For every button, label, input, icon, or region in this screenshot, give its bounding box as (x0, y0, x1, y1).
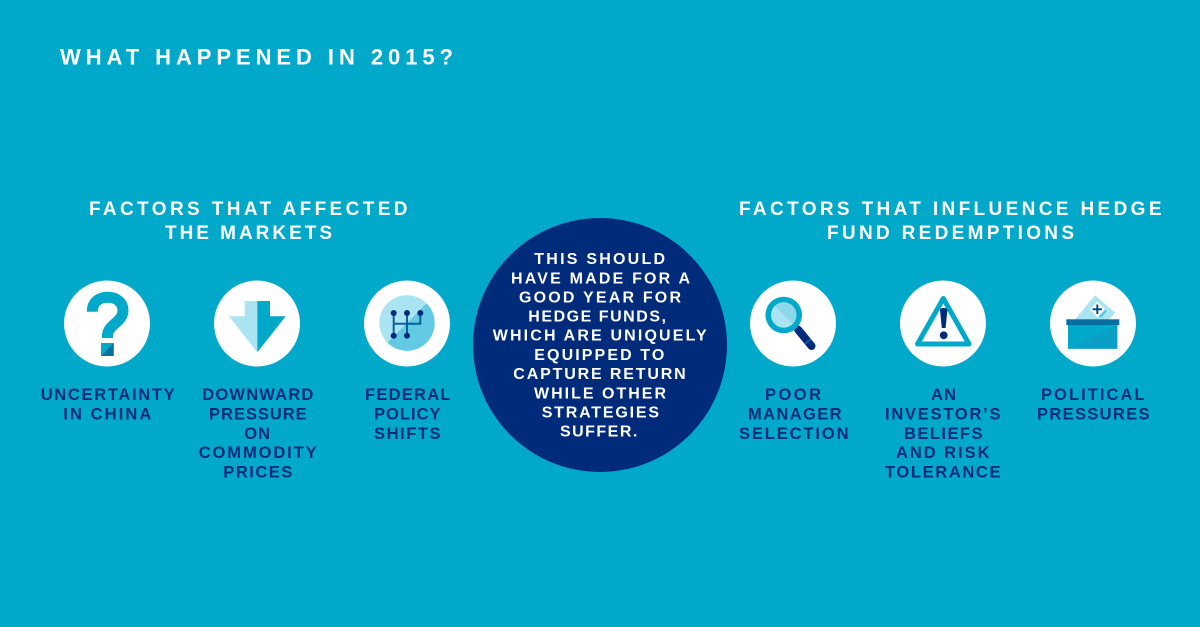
label: an investor's beliefs and risk tolerance: AN (931, 386, 956, 404)
icon: ballot box (1050, 280, 1136, 366)
label: federal policy shifts: POLICY (374, 405, 440, 423)
icon: gear shift (364, 280, 450, 366)
central circle callout: WHILE OTHER (534, 386, 666, 403)
title: WHAT HAPPENED IN 2015? (60, 44, 453, 70)
heading: factors that influence hedge fund redemptions (739, 199, 1162, 244)
label: downward pressure on commodity prices: PRICES (223, 463, 292, 481)
label: poor manager selection: MANAGER (748, 405, 842, 423)
label: federal policy shifts (365, 386, 450, 443)
label: an investor's beliefs and risk tolerance: INVESTOR’S (885, 405, 1000, 423)
label: an investor's beliefs and risk tolerance: AND RISK (896, 444, 990, 462)
icon: magnifying glass (750, 280, 836, 366)
icon: warning triangle (900, 280, 986, 366)
label: downward pressure on commodity prices: DOWNWARD (202, 386, 313, 404)
central circle callout: THIS SHOULD (534, 251, 665, 268)
heading: factors that affected the markets: THE MARKETS (165, 223, 332, 244)
label: uncertainty in China (41, 386, 175, 423)
label: an investor's beliefs and risk tolerance: BELIEFS (904, 425, 982, 443)
label: downward pressure on commodity prices: PRESSURE (209, 405, 307, 423)
central circle callout: STRATEGIES (542, 405, 659, 422)
heading: factors that influence hedge fund redemptions: FUND REDEMPTIONS (827, 223, 1074, 244)
icon: downward arrow (214, 280, 300, 366)
central circle callout: WHICH ARE UNIQUELY (493, 328, 707, 345)
central circle callout: HAVE MADE FOR A (511, 270, 690, 287)
label: downward pressure on commodity prices: COMMODITY (199, 444, 317, 462)
central circle callout (473, 218, 727, 472)
label: an investor's beliefs and risk tolerance (885, 386, 1000, 481)
label: downward pressure on commodity prices: ON (244, 425, 270, 443)
heading: factors that influence hedge fund redemptions: FACTORS THAT INFLUENCE HEDGE (739, 199, 1162, 220)
label: poor manager selection (739, 386, 848, 443)
central circle callout: EQUIPPED TO (534, 347, 664, 364)
label: uncertainty in China: IN CHINA (63, 405, 151, 423)
label: political pressures: POLITICAL (1041, 386, 1144, 404)
label: federal policy shifts: SHIFTS (374, 425, 440, 443)
label: federal policy shifts: FEDERAL (365, 386, 450, 404)
central circle callout: HEDGE FUNDS, (528, 309, 666, 326)
central circle callout: SUFFER. (560, 424, 637, 441)
heading: factors that affected the markets: FACTORS THAT AFFECTED (89, 199, 408, 220)
central circle callout: GOOD YEAR FOR (519, 290, 681, 307)
heading: factors that affected the markets (89, 199, 408, 244)
label: poor manager selection: POOR (765, 386, 821, 404)
label: an investor's beliefs and risk tolerance: TOLERANCE (885, 463, 1000, 481)
label: poor manager selection: SELECTION (739, 425, 848, 443)
label: political pressures: PRESSURES (1037, 405, 1150, 423)
label: political pressures (1037, 386, 1150, 423)
central circle callout: CAPTURE RETURN (513, 366, 686, 383)
icon: question mark (64, 280, 150, 366)
label: downward pressure on commodity prices (199, 386, 317, 481)
label: uncertainty in China: UNCERTAINTY (41, 386, 175, 404)
